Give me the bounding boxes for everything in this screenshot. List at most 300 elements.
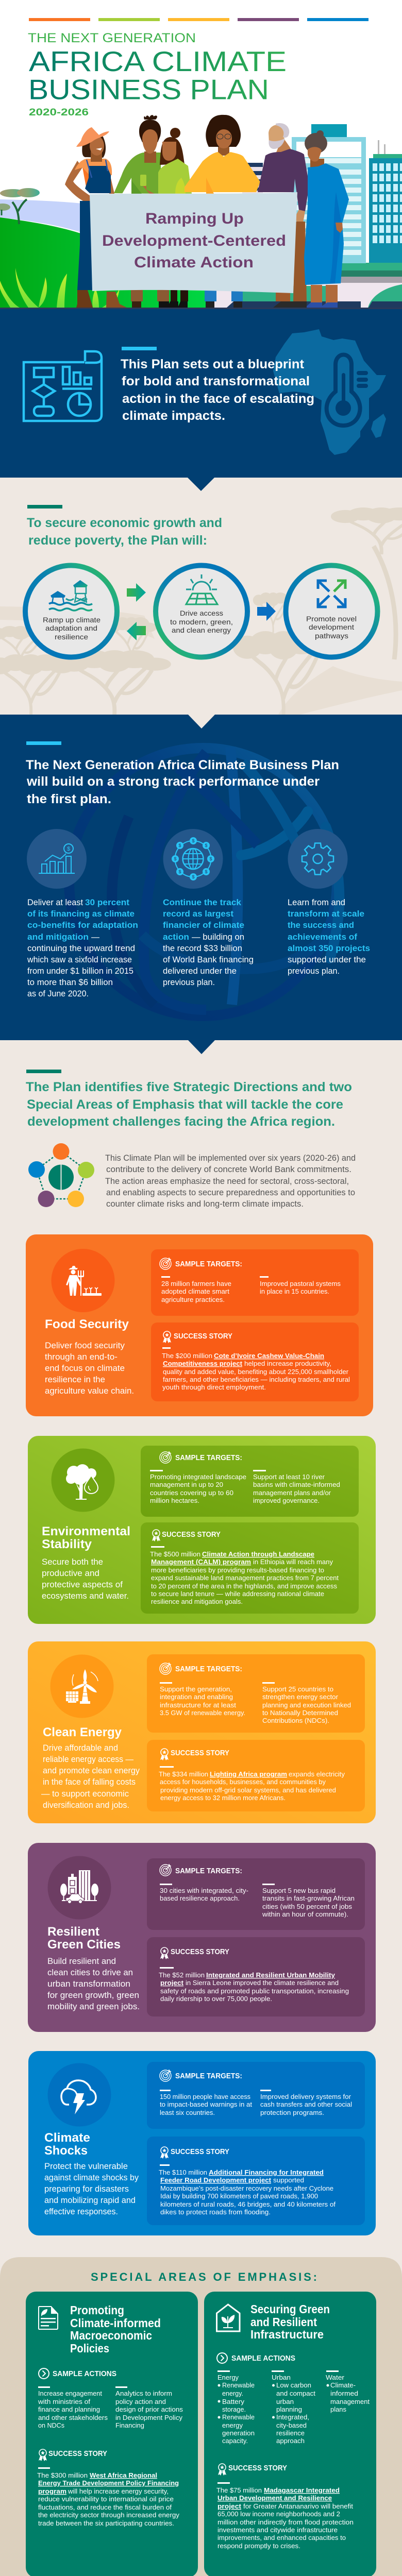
legs and shoes below banner [131, 289, 307, 308]
success story: Mozambique’s post-disaster recovery needs after Cyclone [160, 2184, 333, 2192]
sample targets: 150 million people have access [160, 2093, 250, 2100]
sample targets: transits in fast-growing African [262, 1894, 355, 1902]
panel: climate shocks [28, 2051, 376, 2235]
banner: Climate Action [134, 254, 254, 271]
success story: kilometers of rural roads, 46 bridges, and 40 kilometers of [160, 2200, 336, 2208]
success story: youth through direct employment. [162, 1383, 266, 1391]
sample targets: improved governance. [253, 1497, 320, 1504]
sample actions: SAMPLE ACTIONS [231, 2354, 295, 2363]
success story: resilience and mitigation goals. [151, 1598, 243, 1605]
text: previous plan. [163, 977, 215, 987]
sample actions: Water [326, 2374, 345, 2381]
success story: The $110 million [159, 2168, 207, 2176]
heading and description: Deliver food security [45, 1341, 125, 1350]
text: co-benefits for adaptation [27, 920, 138, 930]
icon: solar panel [186, 574, 217, 604]
heading: The Plan identifies five Strategic Directions and two [26, 1080, 352, 1094]
success story: daily ridership to over 75,000 people. [160, 1995, 272, 2003]
text: the success and [288, 920, 354, 930]
sample actions: Battery [222, 2398, 245, 2405]
label: pathways [315, 632, 348, 640]
person: blue dress [304, 130, 349, 308]
sample targets: to Nationally Determined [262, 1709, 338, 1717]
sample targets: cash transfers and other social [260, 2100, 352, 2108]
success story: dikes to protect roads from flooding. [160, 2208, 271, 2216]
icon: city [47, 1856, 111, 1920]
sample targets: SAMPLE TARGETS: [175, 1260, 242, 1268]
success story: for Greater Antananarivo will benefit [243, 2502, 353, 2510]
sample targets: 30 cities with integrated, city- [160, 1887, 248, 1894]
sample targets [141, 1446, 359, 1517]
success story: to secure land tenure — while addressing national climate [151, 1590, 324, 1598]
title: and Resilient [250, 2315, 317, 2329]
heading and description: Drive affordable and [43, 1743, 118, 1753]
sample targets: cities (with 50 percent of jobs [262, 1903, 353, 1910]
title: Promoting [70, 2303, 124, 2317]
notch [188, 715, 215, 728]
sample actions: design of prior actions [115, 2405, 183, 2413]
sample targets: Support at least 10 river [253, 1473, 325, 1481]
heading and description [45, 1317, 134, 1396]
cyan rule [26, 741, 61, 745]
icon: globe network: $ [192, 874, 195, 879]
sample actions: Increase engagement [38, 2389, 102, 2397]
success story: Competitiveness project [163, 1360, 243, 1367]
sample actions: Renewable [222, 2413, 255, 2421]
sample actions [217, 2353, 370, 2445]
success story: Lighting Africa program [210, 1770, 287, 1778]
sample actions: capacity. [222, 2437, 248, 2445]
success story: energy access to 32 million more Africans. [160, 1794, 286, 1802]
person: yellow shirt with afro [185, 115, 260, 194]
plan will heading: To secure economic growth and [27, 516, 222, 530]
success story: reduce vulnerability to international oil price [38, 2495, 174, 2503]
illustration: people holding banner [0, 115, 402, 309]
card: green and resilient infrastructure [204, 2292, 376, 2576]
sample targets [147, 1654, 365, 1733]
success story: SUCCESS STORY [171, 1749, 229, 1757]
success story: SUCCESS STORY [171, 1948, 229, 1956]
blueprint statement: action in the face of escalating [122, 392, 314, 406]
text: and mitigation [27, 932, 89, 942]
sample actions: urban [276, 2398, 294, 2405]
heading and description: against climate shocks by [44, 2173, 139, 2182]
label: adaptation and [45, 624, 97, 632]
section: strategic directions [0, 1040, 402, 2277]
sample actions: and compact [276, 2389, 315, 2397]
heading and description: Protect the vulnerable [44, 2161, 128, 2171]
text: from under $1 billion in 2015 [27, 966, 133, 976]
success story: in Ethiopia will reach many [253, 1558, 333, 1566]
green rule [26, 1070, 61, 1073]
heading and description: in the face of falling costs [43, 1777, 136, 1787]
success story: The $200 million [162, 1352, 212, 1360]
sample actions: Low carbon [276, 2381, 311, 2389]
sample actions: energy [222, 2421, 243, 2429]
heading and description: for green growth, green [47, 1990, 139, 2000]
sample targets: Improved delivery systems for [260, 2093, 351, 2100]
sample actions: Financing [115, 2421, 144, 2429]
heading and description: Resilient [47, 1925, 99, 1939]
heading and description: mobility and green jobs. [47, 2002, 140, 2011]
heading: SPECIAL AREAS OF EMPHASIS: [91, 2270, 317, 2283]
success story: expands electricity [289, 1770, 345, 1778]
heading and description: resilience in the [45, 1375, 105, 1384]
success story [141, 1522, 359, 1614]
text: — [91, 932, 99, 942]
notch [188, 1040, 215, 1054]
person: purple sweater with beard [258, 123, 309, 301]
text: continuing the upward trend [27, 943, 135, 953]
text: previous plan. [288, 966, 340, 976]
success story: project [160, 1979, 184, 1987]
blueprint statement [121, 357, 314, 423]
sample targets: SAMPLE TARGETS: [175, 1867, 242, 1875]
sample actions: generation [222, 2429, 255, 2437]
sample targets [147, 2062, 365, 2129]
icon: farmer [52, 1249, 114, 1312]
title: 2020-2026 [29, 107, 89, 118]
text: almost 350 projects [288, 943, 370, 953]
text: action [163, 932, 189, 942]
success story: providing modern off-grid solar systems, and has delivered [160, 1786, 336, 1794]
plan will heading: reduce poverty, the Plan will: [28, 533, 207, 548]
success story [147, 1937, 365, 2016]
success story: Idai by building 700 kilometers of paved roads, 1,900 [160, 2192, 318, 2200]
sample targets: million hectares. [150, 1497, 199, 1504]
column: transform at scale [288, 829, 370, 976]
heading and description: end focus on climate [45, 1363, 125, 1373]
sample actions: Integrated, [276, 2413, 309, 2421]
success story: program [38, 2487, 66, 2495]
title: Climate-informed [70, 2316, 161, 2330]
success story: Urban Development and Resilience [217, 2494, 332, 2502]
sample targets: adopted climate smart [161, 1287, 229, 1295]
sample actions: and other stakeholders [38, 2414, 108, 2421]
text: — building on [192, 932, 244, 942]
success story: farmers, and other beneficiaries — including traders, and rural [163, 1376, 350, 1383]
heading: the first plan. [27, 792, 111, 806]
intro paragraph [105, 1153, 356, 1209]
title [250, 2302, 330, 2341]
landscape [0, 199, 402, 309]
label: resilience [55, 633, 88, 641]
sample targets: based resilience approach. [160, 1894, 240, 1902]
column: largest financier [163, 829, 254, 987]
success story: helped increase productivity, [244, 1360, 331, 1367]
heading and description: clean cities to drive an [47, 1968, 133, 1977]
sample targets: Support the generation, [160, 1685, 232, 1693]
green rule [27, 505, 62, 509]
sample targets: basins with climate-informed [253, 1481, 340, 1488]
title: Policies [70, 2342, 109, 2355]
heading and description: productive and [42, 1568, 99, 1578]
success story: safety of roads and promoted public transportation, increasing [160, 1987, 349, 1995]
success story: SUCCESS STORY [174, 1332, 232, 1341]
panel: clean energy [28, 1641, 376, 1823]
icon: globe network: $ [178, 843, 181, 848]
title: THE NEXT GENERATION [28, 31, 196, 45]
label: and clean energy [172, 626, 231, 634]
section: blueprint [0, 309, 402, 478]
sample targets: integration and enabling [160, 1693, 233, 1701]
sample actions: management [330, 2398, 370, 2405]
sample targets: Support 25 countries to [262, 1685, 333, 1693]
notch [188, 478, 214, 491]
icon: greenhouse with plant [216, 2304, 240, 2331]
heading and description: Green Cities [47, 1938, 121, 1952]
success story: more beneficiaries by providing results-based financing to [151, 1566, 324, 1574]
success story: improvements, and enhanced capacities to [217, 2534, 346, 2541]
arrow left [127, 622, 146, 640]
sample targets: management plans and/or [253, 1489, 331, 1497]
heading and description: agriculture value chain. [45, 1386, 134, 1396]
sample targets: protection programs. [260, 2109, 324, 2116]
icon: globe network: $ [205, 843, 208, 848]
sample actions: Climate- [330, 2381, 356, 2389]
success story: access for households, businesses, and communities by [160, 1778, 326, 1786]
success story: quality and added value, benefiting about 225,000 smallholder [163, 1368, 349, 1376]
text: financier of climate [163, 920, 244, 930]
success story: SUCCESS STORY [48, 2450, 107, 2458]
background globe [69, 747, 339, 1016]
heading and description [41, 1725, 140, 1810]
sample targets [147, 1858, 365, 1930]
heading and description: protective aspects of [42, 1580, 123, 1589]
sample targets: strengthen energy sector [262, 1693, 339, 1701]
sample actions: Energy [217, 2374, 239, 2381]
icon: globe network: $ [174, 856, 177, 861]
heading and description: Secure both the [42, 1557, 103, 1567]
sample actions: SAMPLE ACTIONS [53, 2370, 116, 2378]
sample targets: countries covering up to 60 [150, 1489, 233, 1497]
sample targets: infrastructure for at least [160, 1701, 236, 1709]
sample targets: SAMPLE TARGETS: [175, 2072, 242, 2080]
heading and description: and mobilizing rapid and [44, 2195, 136, 2205]
icon: globe network: $ [205, 869, 208, 874]
label: Ramp up climate [43, 616, 100, 624]
success story [147, 2137, 365, 2225]
success story: trade between the six participating countries. [38, 2519, 174, 2527]
sample actions: energy. [222, 2389, 243, 2397]
heading and description: Food Security [45, 1317, 129, 1331]
success story [216, 2464, 354, 2550]
sample actions: resilience [276, 2429, 305, 2437]
sample targets: planning and execution linked [262, 1701, 351, 1709]
icon: globe network: $ [192, 838, 195, 843]
success story: to 20 percent of the area in the highlands, and improve access [151, 1582, 338, 1590]
icon: five directions diagram [28, 1143, 94, 1207]
column: financing [27, 829, 138, 998]
success story: Climate Action through Landscape [202, 1550, 314, 1558]
grass blades [0, 268, 120, 308]
text: Deliver at least [27, 897, 83, 907]
icon: globe network: $ [178, 869, 181, 874]
heading and description: reliable energy access — [43, 1754, 133, 1764]
heading and description: and promote clean energy [43, 1766, 140, 1775]
text: Learn from and [288, 897, 345, 907]
text: delivered under the [163, 966, 237, 976]
sample targets: management in up to 20 [150, 1481, 223, 1488]
label [43, 616, 100, 641]
card: macroeconomic policies [26, 2292, 198, 2576]
sample actions: on NDCs [38, 2421, 64, 2429]
intro paragraph: contribute to the delivery of concrete World Bank commitments. [106, 1164, 351, 1174]
person: lime shirt [158, 128, 192, 194]
icon: document with leaf [39, 2307, 58, 2329]
text: the record $33 billion [163, 943, 242, 953]
label: Promote novel [306, 615, 357, 623]
text: achievements of [288, 932, 357, 942]
cyan rule [122, 347, 157, 350]
heading and description: preparing for disasters [44, 2184, 129, 2194]
title: Infrastructure [250, 2328, 324, 2341]
blueprint statement: climate impacts. [122, 409, 225, 423]
sample targets: Promoting integrated landscape [150, 1473, 246, 1481]
success story [151, 1323, 359, 1401]
heading: development challenges facing the Africa region. [27, 1114, 335, 1129]
icon: tree and water drop [52, 1449, 114, 1512]
heading [26, 758, 339, 806]
success story: The $334 million [159, 1770, 208, 1778]
heading and description: Shocks [44, 2144, 88, 2158]
sample targets: to impact-based warnings in at [160, 2100, 252, 2108]
sample actions: city-based [276, 2421, 307, 2429]
sample actions: informed [330, 2389, 358, 2397]
success story: project [217, 2502, 242, 2510]
text: to more than $6 billion [27, 977, 113, 987]
success story: The $300 million [37, 2471, 88, 2479]
label [170, 609, 233, 634]
title: AFRICA CLIMATE [29, 45, 287, 77]
text: of its financing as climate [27, 909, 135, 919]
blueprint statement: This Plan sets out a blueprint [121, 357, 305, 371]
text [288, 897, 370, 976]
success story: Feeder Road Development project [160, 2176, 272, 2184]
label [306, 615, 357, 640]
circle: pathways [286, 566, 377, 657]
intro paragraph: counter climate risks and long-term climate impacts. [106, 1199, 304, 1209]
sample actions: Renewable [222, 2381, 255, 2389]
intro paragraph: The action areas emphasize the need for sectoral, cross-sectoral, [105, 1176, 349, 1186]
success story: respond promptly to crises. [217, 2542, 300, 2550]
success story: will help increase energy security, [68, 2487, 169, 2495]
plan will heading [27, 516, 222, 548]
success story: West Africa Regional [90, 2471, 157, 2479]
text: transform at scale [288, 909, 364, 919]
person: farmer [65, 127, 127, 308]
heading and description: Stability [42, 1537, 92, 1551]
success story: supported [273, 2176, 304, 2184]
text: of World Bank financing [163, 955, 254, 964]
background trees [0, 507, 402, 715]
success story: fluctuations, and reduce the fiscal burden of [38, 2503, 172, 2511]
title: BUSINESS PLAN [28, 73, 269, 105]
success story: Integrated and Resilient Urban Mobility [206, 1971, 336, 1979]
success story: The $500 million [150, 1550, 200, 1558]
success story [37, 2449, 180, 2527]
banner: Development-Centered [102, 232, 286, 249]
sample actions: in Development Policy [115, 2414, 182, 2421]
heading and description: Environmental [42, 1524, 130, 1538]
panel: environmental stability [28, 1436, 376, 1624]
heading and description [42, 1524, 130, 1601]
sample actions [38, 2368, 183, 2429]
heading and description: urban transformation [47, 1979, 130, 1989]
icon: four arrows [318, 581, 345, 607]
heading and description: effective responses. [44, 2207, 118, 2216]
sample actions: Urban [272, 2374, 291, 2381]
acacia trees left [0, 188, 40, 224]
heading: The Next Generation Africa Climate Business Plan [26, 758, 339, 772]
success story: in Sierra Leone improved the climate resilience and [186, 1979, 339, 1987]
text: Continue the track [163, 897, 242, 907]
heading [26, 1080, 352, 1129]
label: development [309, 623, 354, 631]
heading and description: Build resilient and [47, 1956, 116, 1966]
section: plan will [0, 478, 402, 715]
icon: globe network [163, 829, 223, 889]
success story: Management (CALM) program [151, 1558, 251, 1566]
heading and description: through an end-to- [45, 1352, 118, 1362]
success story: Cote d’Ivoire Cashew Value-Chain [214, 1352, 324, 1360]
heading: will build on a strong track performance under [26, 774, 320, 789]
banner: Ramping Up [145, 210, 244, 227]
success story [147, 1740, 365, 1811]
sample targets: Improved pastoral systems [260, 1280, 341, 1287]
heading and description: ecosystems and water. [42, 1591, 129, 1601]
arrow right blue [257, 602, 276, 621]
icon: water towers [49, 580, 92, 611]
person: green shirt [114, 115, 161, 194]
sample actions: Analytics to inform [115, 2389, 172, 2397]
icon: africa thermometer [273, 329, 386, 455]
sample targets: 3.5 GW of renewable energy. [160, 1709, 245, 1717]
sample targets: SAMPLE TARGETS: [175, 1454, 242, 1462]
blueprint statement: for bold and transformational [122, 374, 310, 388]
heading and description: diversification and jobs. [43, 1800, 129, 1810]
intro paragraph: This Climate Plan will be implemented over six years (2020-26) and [105, 1153, 356, 1163]
sample targets: SAMPLE TARGETS: [175, 1665, 242, 1673]
title: Macroeconomic [70, 2329, 152, 2342]
success story: expand sustainable land management practices from 7 percent [151, 1574, 339, 1582]
icon: gear [288, 829, 347, 889]
panel: food security [26, 1234, 373, 1416]
success story: investments and citywide infrastructure [217, 2526, 338, 2534]
section: track record [0, 715, 402, 1040]
sample actions: storage. [222, 2405, 246, 2413]
sample targets: in place in 15 countries. [260, 1287, 329, 1295]
sample targets: 28 million farmers have [161, 1280, 231, 1287]
banner [90, 192, 297, 293]
sample targets: Contributions (NDCs). [262, 1717, 329, 1724]
success story: million other indirectly from flood protection [217, 2518, 354, 2526]
circle: energy [156, 566, 247, 657]
text: as of June 2020. [27, 989, 89, 998]
heading and description: Clean Energy [43, 1725, 122, 1739]
text: supported under the [288, 955, 366, 964]
text: 30 percent [85, 897, 129, 907]
heading and description: — to support economic [41, 1789, 129, 1799]
sample targets: Support 5 new bus rapid [262, 1887, 336, 1894]
success story: Energy Trade Development Policy Financing [38, 2479, 179, 2487]
panel: resilient green cities [28, 1843, 376, 2032]
sample targets: agriculture practices. [161, 1296, 225, 1303]
sample targets: least six countries. [160, 2109, 215, 2116]
text: which saw a sixfold increase [27, 955, 132, 964]
text: record as largest [163, 909, 233, 919]
icon: chart: $ [67, 846, 70, 852]
